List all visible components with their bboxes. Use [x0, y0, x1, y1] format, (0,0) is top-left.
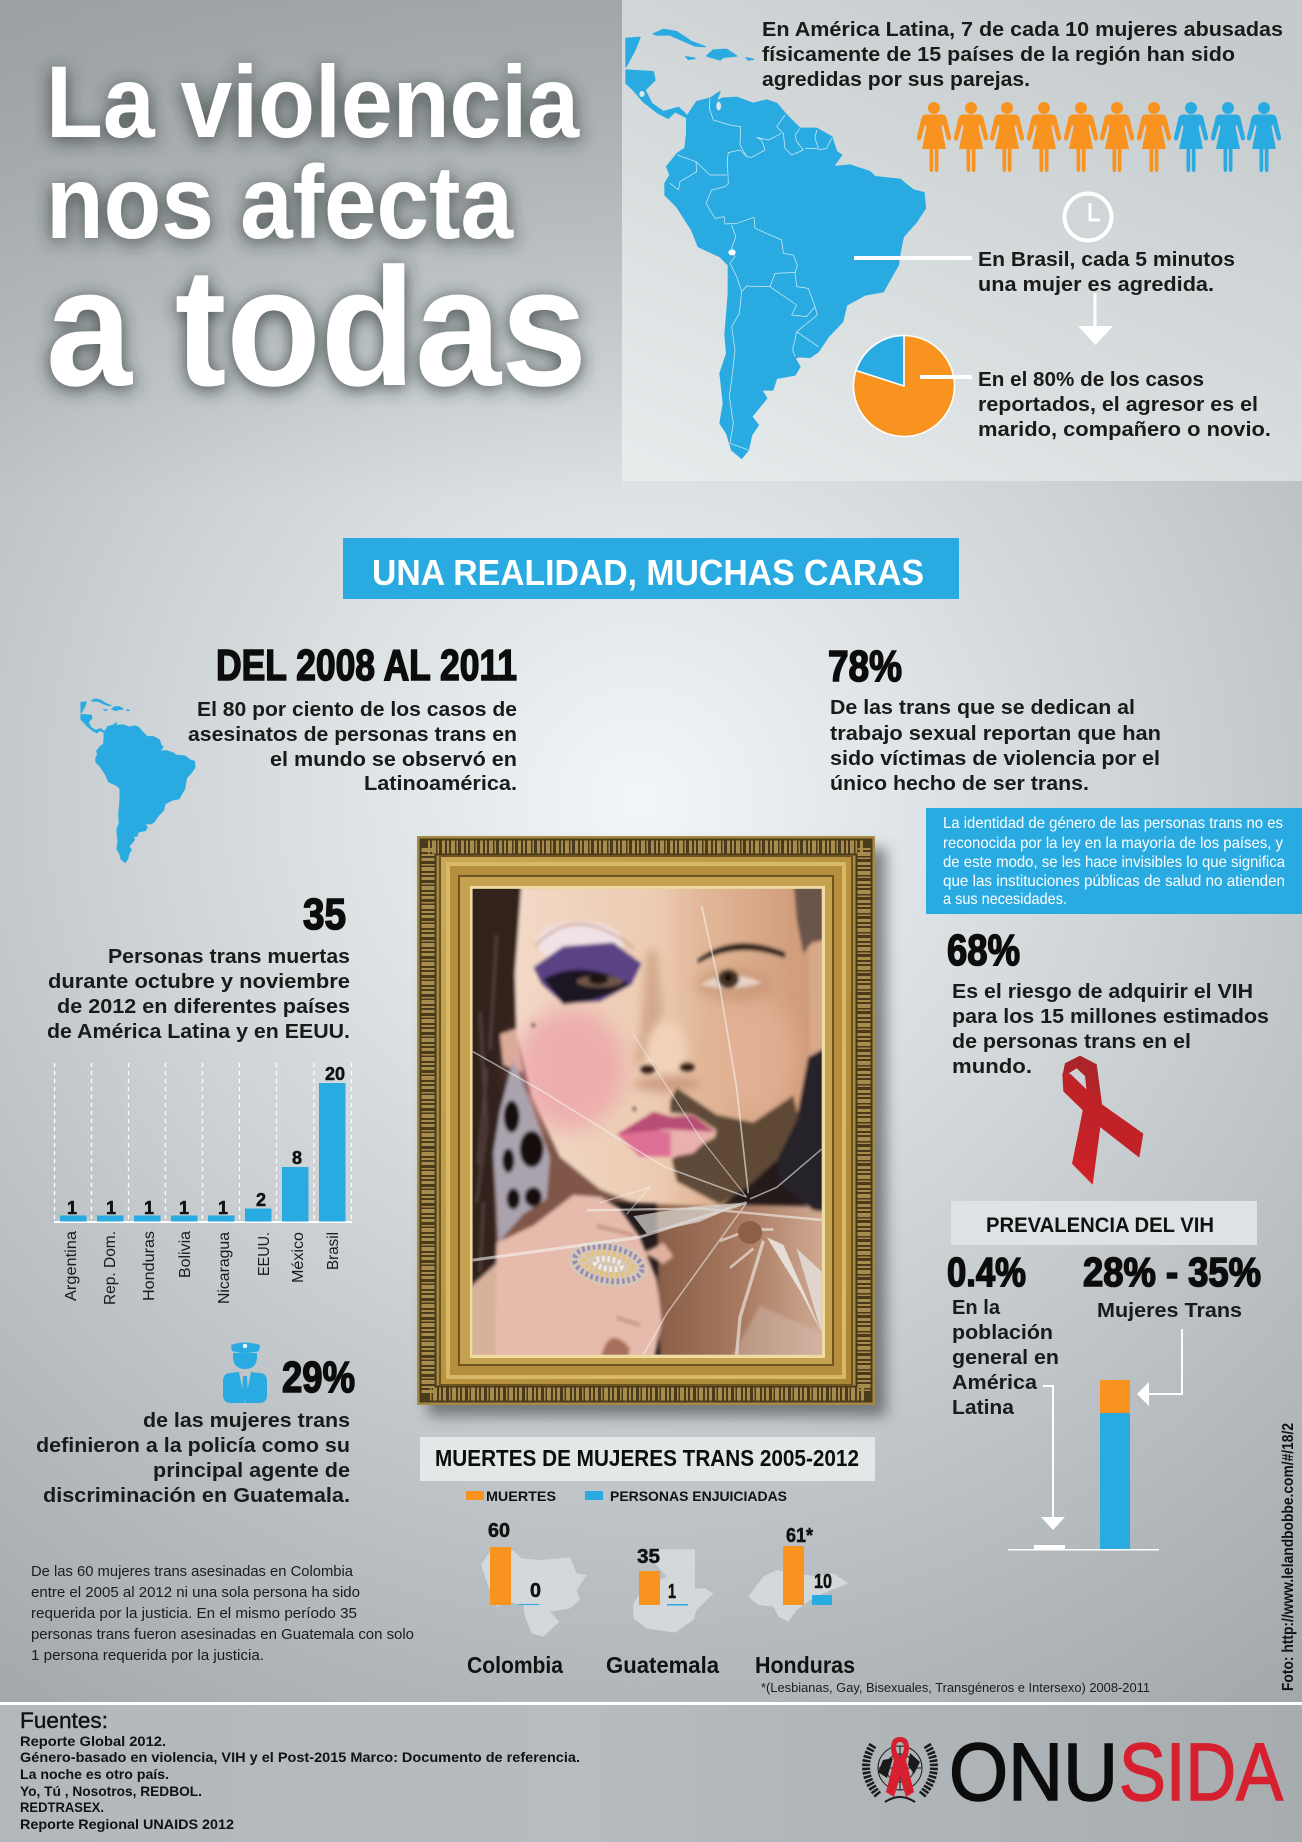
photo credit: Foto: http://www.lelandbobbe.com/#/18/2 [1280, 1423, 1297, 1691]
heading: del 2008 al 2011: DEL 2008 AL 2011 [216, 641, 517, 690]
text: 7 de cada 10: En América Latina, 7 de cada 10 mujeres abusadas [762, 19, 1283, 41]
text: riesgo VIH [952, 981, 1269, 1078]
logo: ONUSIDA [866, 1727, 1283, 1818]
text: 80 por ciento: El 80 por ciento de los casos de [197, 699, 517, 721]
connector: Brasil [854, 256, 972, 260]
text: 80%: reportados, el agresor es el [978, 394, 1258, 416]
legend: MUERTES [486, 1488, 556, 1504]
number: 78%: 78% [828, 642, 902, 691]
map chart: Colombia, Guatemala, Honduras: 10 [814, 1571, 832, 1593]
text: personas trans muertas: de 2012 en diferentes países [57, 996, 350, 1018]
callout: identidad de genero: a sus necesidades. [943, 891, 1067, 908]
heading: muertes de mujeres trans: MUERTES DE MUJERES TRANS 2005-2012 [435, 1445, 859, 1471]
text: 80%: marido, compañero o novio. [978, 419, 1271, 441]
text: personas trans muertas: de América Latina y en EEUU. [47, 1021, 350, 1043]
bar chart: trans deaths by country: 20 [325, 1064, 345, 1084]
text: 80 por ciento: Latinoamérica. [364, 773, 517, 795]
text: Colombia Guatemala note: 1 persona requerida por la justicia. [31, 1647, 264, 1664]
title: nos afecta [46, 145, 514, 261]
number: 35: 35 [303, 890, 346, 939]
map chart: Colombia, Guatemala, Honduras: 60 [488, 1520, 510, 1542]
bar chart: trans deaths by country: EEUU. [256, 1232, 273, 1276]
number: 28% - 35%: 28% - 35% [1083, 1249, 1261, 1295]
text: riesgo VIH: para los 15 millones estimados [952, 1006, 1269, 1028]
heading: prevalencia del VIH [951, 1201, 1257, 1245]
bar chart: trans deaths by country: 1 [144, 1198, 154, 1218]
pictogram: 7 of 10 women [917, 102, 1281, 172]
text: 80%: En el 80% de los casos [978, 369, 1204, 391]
text: Colombia Guatemala note: De las 60 mujeres trans asesinadas en Colombia [31, 1563, 354, 1580]
text: 80 por ciento: asesinatos de personas trans en [188, 724, 517, 746]
text: riesgo VIH: Es el riesgo de adquirir el VIH [952, 981, 1253, 1003]
text: poblacion general: Latina [952, 1397, 1015, 1419]
text: riesgo VIH: mundo. [952, 1056, 1032, 1078]
sources [20, 1708, 580, 1832]
photo: framed portrait [417, 836, 886, 1416]
bar chart: trans deaths by country: 1 [67, 1198, 77, 1218]
map chart: Colombia, Guatemala, Honduras: Colombia [467, 1652, 563, 1678]
map chart: Colombia, Guatemala, Honduras [467, 1520, 855, 1678]
title [46, 45, 587, 421]
map chart: Colombia, Guatemala, Honduras: Honduras [755, 1652, 855, 1678]
text: personas trans muertas: Personas trans muertas [108, 946, 350, 968]
callout: identidad de genero: que las instituciones públicas de salud no atienden [943, 873, 1285, 890]
text: trabajo sexual: trabajo sexual reportan que han [830, 723, 1161, 745]
sources: Yo, Tú , Nosotros, REDBOL. [20, 1783, 202, 1799]
callout: identidad de genero: reconocida por la ley en la mayoría de los países, y [943, 835, 1283, 852]
sources: Fuentes: [20, 1708, 108, 1733]
background: title area shade [0, 0, 622, 500]
logo: ONUSIDA: ONU [949, 1727, 1118, 1818]
map chart: Colombia, Guatemala, Honduras: 61* [786, 1525, 813, 1547]
number: 0.4%: 0.4% [947, 1249, 1026, 1295]
bar chart: trans deaths by country: 1 [106, 1198, 116, 1218]
text: 80 por ciento: el mundo se observó en [270, 749, 517, 771]
text: Colombia Guatemala note: personas trans fueron asesinadas en Guatemala con solo [31, 1626, 414, 1643]
text: poblacion general: América [952, 1372, 1038, 1394]
text: trabajo sexual: sido víctimas de violencia por el [830, 748, 1160, 770]
arrow: to tall bar [1137, 1329, 1182, 1406]
pie chart: 80% [854, 336, 954, 436]
text: Colombia Guatemala note [31, 1563, 414, 1664]
text: policia: discriminación en Guatemala. [43, 1485, 350, 1507]
callout: identidad de genero: La identidad de género de las personas trans no es [943, 815, 1283, 832]
map chart: Colombia, Guatemala, Honduras: 35 [637, 1546, 660, 1568]
bar chart: trans deaths by country: Bolivia [177, 1231, 194, 1278]
text: 7 de cada 10: físicamente de 15 países de la región han sido [762, 44, 1235, 66]
text: 7 de cada 10: agredidas por sus parejas. [762, 69, 1030, 91]
map chart: Colombia, Guatemala, Honduras: 0 [530, 1580, 541, 1602]
text: Brasil: una mujer es agredida. [978, 274, 1214, 296]
sources: Género-basado en violencia, VIH y el Post-2015 Marco: Documento de referencia. [20, 1749, 580, 1765]
bar chart: trans deaths by country: Nicaragua [216, 1232, 233, 1304]
text: Colombia Guatemala note: entre el 2005 al 2012 ni una sola persona ha sido [31, 1584, 360, 1601]
text: policia: principal agente de [153, 1460, 350, 1482]
bar chart: trans deaths by country: Argentina [63, 1231, 80, 1301]
bar chart: trans deaths by country: Honduras [141, 1231, 158, 1301]
text: policia: definieron a la policía como su [36, 1435, 350, 1457]
banner [343, 538, 959, 599]
bar chart: trans deaths by country: Brasil [325, 1232, 342, 1270]
bar chart: trans deaths by country: México [290, 1232, 307, 1283]
title: La violencia [46, 45, 580, 159]
text: trabajo sexual: único hecho de ser trans. [830, 773, 1089, 795]
text: Colombia Guatemala note: requerida por la justicia. En el mismo período 35 [31, 1605, 357, 1622]
text: poblacion general: En la [952, 1297, 1001, 1319]
bar chart: trans deaths by country: Rep. Dom. [102, 1231, 119, 1305]
title: a todas [46, 233, 587, 421]
text: personas trans muertas: durante octubre y noviembre [48, 971, 350, 993]
bar chart: trans deaths by country: 8 [292, 1148, 302, 1168]
map chart: Colombia, Guatemala, Honduras: 1 [668, 1581, 676, 1603]
sources: REDTRASEX. [20, 1799, 104, 1815]
text: trabajo sexual: De las trans que se dedican al [830, 697, 1135, 719]
panel: map background [622, 0, 1302, 481]
banner: UNA REALIDAD, MUCHAS CARAS [372, 552, 924, 593]
text: Brasil [978, 249, 1235, 296]
text: riesgo VIH: de personas trans en el [952, 1031, 1191, 1053]
bar chart: HIV prevalence [1008, 1380, 1159, 1550]
bar chart: trans deaths by country: 2 [256, 1190, 266, 1210]
sources: Reporte Regional UNAIDS 2012 [20, 1816, 234, 1832]
text: personas trans muertas [47, 946, 350, 1043]
map chart: Colombia, Guatemala, Honduras: Guatemala [606, 1652, 719, 1678]
callout: identidad de genero: de este modo, se les hace invisibles lo que significa [943, 854, 1285, 871]
bar chart: trans deaths by country: 1 [179, 1198, 189, 1218]
map: small Latin America [81, 699, 195, 862]
number: 29%: 29% [282, 1353, 355, 1402]
text: 7 de cada 10 [762, 19, 1283, 91]
text: trabajo sexual [830, 697, 1161, 795]
heading: muertes de mujeres trans [420, 1437, 875, 1481]
text: poblacion general: población [952, 1322, 1053, 1344]
text: Brasil: En Brasil, cada 5 minutos [978, 249, 1235, 271]
label: mujeres trans: Mujeres Trans [1097, 1300, 1242, 1322]
connector: pie [920, 375, 972, 379]
number: 68%: 68% [947, 926, 1020, 975]
legend: PERSONAS ENJUICIADAS [610, 1488, 787, 1504]
icon: red ribbon [1062, 1056, 1143, 1185]
text: 80 por ciento [188, 699, 517, 795]
legend [466, 1488, 787, 1504]
text: policia [36, 1410, 350, 1507]
text: poblacion general: general en [952, 1347, 1059, 1369]
arrow: to small bar [1041, 1386, 1065, 1530]
text: policia: de las mujeres trans [143, 1410, 350, 1432]
arrow: down [1078, 293, 1113, 345]
icon: police officer [223, 1342, 267, 1403]
text: poblacion general [952, 1297, 1059, 1419]
callout: identidad de genero [926, 808, 1302, 914]
footnote: *(Lesbianas, Gay, Bisexuales, Transgéneros e Intersexo) 2008-2011 [761, 1680, 1150, 1695]
sources: La noche es otro país. [20, 1766, 169, 1782]
heading: prevalencia del VIH: PREVALENCIA DEL VIH [986, 1214, 1214, 1237]
icon: clock [1064, 194, 1112, 240]
map: Latin America [626, 29, 925, 458]
sources: Reporte Global 2012. [20, 1733, 166, 1749]
bar chart: trans deaths by country [54, 1063, 352, 1305]
bar chart: trans deaths by country: 1 [218, 1198, 228, 1218]
text: 80% [978, 369, 1271, 441]
footer band [0, 1702, 1302, 1842]
